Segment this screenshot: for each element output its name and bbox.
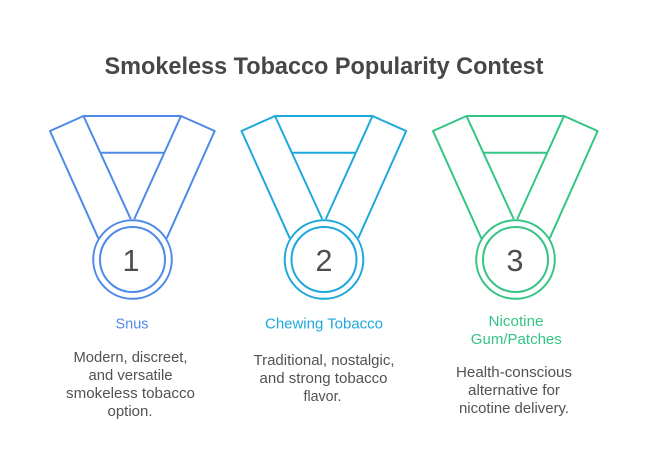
text: Snus description: smokeless tobacco <box>66 386 195 402</box>
panel: Nicotine Gum/Patches <box>433 116 598 417</box>
heading: Chewing Tobacco: Chewing Tobacco <box>265 316 383 332</box>
text: Snus description: option. <box>108 404 152 420</box>
heading: Nicotine Gum/Patches <box>471 314 562 348</box>
text: Nicotine Gum/Patches description: Health-conscious <box>456 365 572 381</box>
icon: medal 3 <box>433 116 598 299</box>
text: Nicotine Gum/Patches description: alternative for <box>468 383 560 399</box>
text: Chewing Tobacco description: and strong tobacco <box>260 371 388 387</box>
text: Nicotine Gum/Patches description: nicotine delivery. <box>459 401 569 417</box>
text: Snus description: Modern, discreet, <box>74 350 188 366</box>
icon: medal 3: 3 <box>507 244 523 278</box>
heading: Nicotine Gum/Patches: Gum/Patches <box>471 332 562 348</box>
text: Chewing Tobacco description: Traditional, nostalgic, <box>254 353 394 369</box>
text: Nicotine Gum/Patches description <box>456 365 572 417</box>
icon: medal 1 <box>50 116 215 299</box>
icon: medal 1: 1 <box>123 244 139 278</box>
text: Snus description: and versatile <box>88 368 172 384</box>
icon: medal 2: 2 <box>316 244 332 278</box>
heading: Nicotine Gum/Patches: Nicotine <box>488 314 544 330</box>
panel: Chewing Tobacco <box>242 116 406 405</box>
icon: medal 2 <box>242 116 406 299</box>
heading: Snus: Snus <box>116 316 148 332</box>
title: Smokeless Tobacco Popularity Contest <box>104 53 544 80</box>
text: Chewing Tobacco description <box>254 353 394 405</box>
text: Snus description <box>66 350 195 420</box>
text: Chewing Tobacco description: flavor. <box>304 389 342 405</box>
panel: Snus <box>50 116 215 420</box>
